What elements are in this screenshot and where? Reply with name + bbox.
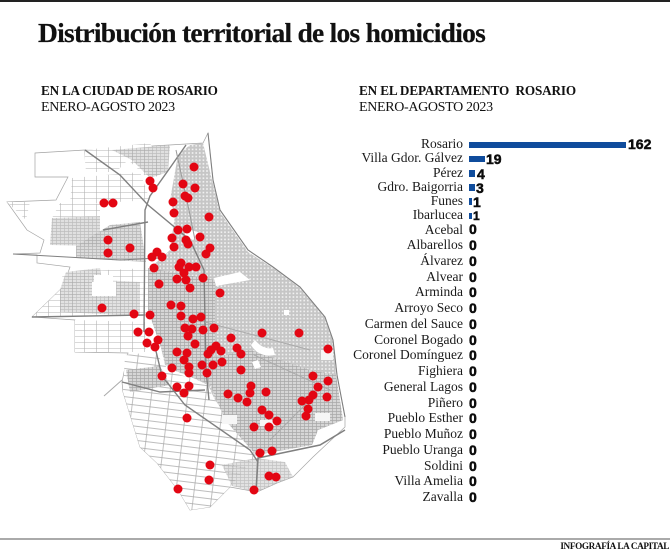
row: General Lagos: 0 <box>469 379 477 395</box>
bar chart: homicides by locality <box>353 136 652 505</box>
row: Arminda: Arminda <box>415 284 463 299</box>
row: Arminda: 0 <box>469 284 477 300</box>
row: Pérez <box>433 164 485 182</box>
bottom rule <box>0 538 670 540</box>
city outline and street texture <box>7 133 345 510</box>
row: Pueblo Uranga: 0 <box>469 442 477 458</box>
row: Soldini: Soldini <box>424 458 463 473</box>
heading: city map: EN LA CIUDAD DE ROSARIO <box>41 83 218 98</box>
row: Piñero <box>428 395 477 411</box>
heading: department chart <box>359 83 576 115</box>
row: Albarellos: Albarellos <box>407 237 463 252</box>
row: Álvarez: Álvarez <box>420 252 463 268</box>
row: Villa Amelia: Villa Amelia <box>394 473 463 488</box>
row: Rosario: 162 <box>628 136 651 152</box>
row: Coronel Domínguez: Coronel Domínguez <box>353 347 463 362</box>
row: Villa Gdor. Gálvez: Villa Gdor. Gálvez <box>361 150 463 165</box>
top rule <box>0 0 670 2</box>
title: Distribución territorial de los homicidios <box>38 17 485 48</box>
row: Pueblo Muñoz: Pueblo Muñoz <box>384 426 463 441</box>
row: Coronel Bogado: Coronel Bogado <box>374 332 463 347</box>
row: Villa Gdor. Gálvez <box>361 150 502 167</box>
row: Ibarlucea: Ibarlucea <box>413 207 463 222</box>
row: Villa Amelia: 0 <box>469 473 477 489</box>
row: Fighiera: Fighiera <box>418 363 463 378</box>
main roads and rails <box>13 133 345 492</box>
map: homicides in Rosario city <box>6 132 346 510</box>
heading: city map <box>41 83 218 115</box>
row: Carmen del Sauce: 0 <box>469 316 477 332</box>
row: Funes: 1 <box>473 194 481 210</box>
heading: city map: ENERO-AGOSTO 2023 <box>41 100 175 115</box>
row: Funes <box>431 192 481 210</box>
row: Soldini <box>424 458 477 474</box>
row: Pérez: 4 <box>477 166 485 182</box>
row: Zavalla: 0 <box>469 489 477 505</box>
row: Fighiera: 0 <box>469 363 477 379</box>
row: Álvarez: 0 <box>469 252 477 268</box>
row: Albarellos: 0 <box>469 237 477 253</box>
row: Alvear: 0 <box>469 269 477 285</box>
row: Pueblo Esther: 0 <box>469 410 477 426</box>
row: Coronel Domínguez: 0 <box>469 347 477 363</box>
row: Pueblo Esther: Pueblo Esther <box>388 410 463 425</box>
row: Piñero: 0 <box>469 395 477 411</box>
row: Zavalla: Zavalla <box>423 489 463 504</box>
row: Carmen del Sauce: Carmen del Sauce <box>365 316 463 331</box>
row: Acebal: Acebal <box>425 222 463 237</box>
row: Ibarlucea: 1 <box>473 209 480 223</box>
row: Soldini: 0 <box>469 458 477 474</box>
row: Funes: Funes <box>431 192 463 208</box>
row: Gdro. Baigorria: 3 <box>476 180 484 196</box>
row: Pérez: Pérez <box>433 164 463 180</box>
row: Zavalla <box>423 489 477 505</box>
row: Coronel Bogado: 0 <box>469 332 477 348</box>
heading: department chart: ENERO-AGOSTO 2023 <box>359 100 493 115</box>
heading: department chart: EN EL DEPARTAMENTO ROSARIO <box>359 83 576 98</box>
row: Pueblo Uranga: Pueblo Uranga <box>382 442 463 457</box>
row: Acebal: 0 <box>469 221 477 237</box>
row: Rosario: Rosario <box>421 136 463 151</box>
row: Arroyo Seco: 0 <box>469 300 477 316</box>
row: Gdro. Baigorria: Gdro. Baigorria <box>378 178 463 194</box>
row: Piñero: Piñero <box>428 395 463 410</box>
homicide location dots <box>98 162 332 494</box>
row: Villa Gdor. Gálvez: 19 <box>486 151 502 167</box>
row: General Lagos: General Lagos <box>384 379 463 394</box>
row: Rosario <box>421 136 652 152</box>
row: Acebal <box>424 221 477 237</box>
row: Alvear: Alvear <box>426 269 463 284</box>
row: Alvear <box>426 269 477 285</box>
row: Pueblo Muñoz: 0 <box>469 426 477 442</box>
row: Arroyo Seco: Arroyo Seco <box>394 300 463 315</box>
